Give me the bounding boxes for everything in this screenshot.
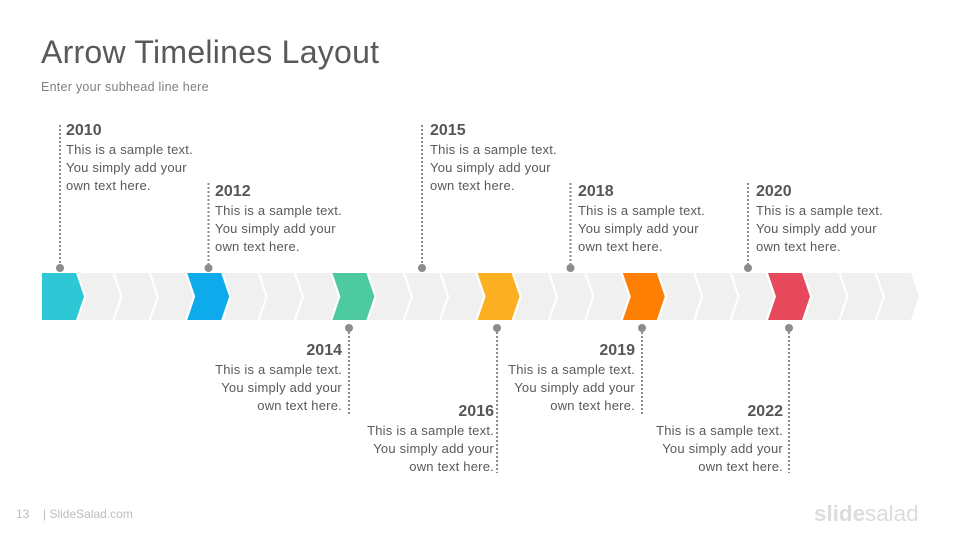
text: 2020: You simply add your xyxy=(756,221,877,236)
title: Arrow Timelines Layout xyxy=(41,34,379,70)
text: 2012 xyxy=(215,183,342,254)
text: 2016: own text here. xyxy=(409,459,494,474)
text: 2010: This is a sample text. xyxy=(66,142,193,157)
text: 2014: You simply add your xyxy=(221,380,342,395)
chevron 2012 xyxy=(187,273,229,320)
text: 2015: 2015 xyxy=(430,122,466,139)
chevron 2019 xyxy=(623,273,665,320)
text: 2022: own text here. xyxy=(698,459,783,474)
text: 2014 xyxy=(215,342,342,413)
text: 2018: 2018 xyxy=(578,183,614,200)
text: 2012: This is a sample text. xyxy=(215,203,342,218)
page number: 13 xyxy=(16,507,29,521)
text: 2010: You simply add your xyxy=(66,160,187,175)
text: 2022: 2022 xyxy=(747,403,783,420)
text: 2022: This is a sample text. xyxy=(656,423,783,438)
text: 2014: This is a sample text. xyxy=(215,362,342,377)
text: 2015 xyxy=(430,122,557,193)
text: 2018: You simply add your xyxy=(578,221,699,236)
text: 2020: 2020 xyxy=(756,183,792,200)
footer: site name: | SlideSalad.com xyxy=(43,507,133,521)
subhead: Enter your subhead line here xyxy=(41,80,209,94)
text: 2018: own text here. xyxy=(578,239,663,254)
chevron 2022 xyxy=(768,273,810,320)
text: 2010 xyxy=(66,122,193,193)
text: 2015: You simply add your xyxy=(430,160,551,175)
chevron 2010 xyxy=(42,273,84,320)
connectors and dots xyxy=(56,125,793,473)
text: 2016 xyxy=(367,403,494,474)
text: 2019: This is a sample text. xyxy=(508,362,635,377)
text: 2019: 2019 xyxy=(599,342,635,359)
text: 2019 xyxy=(508,342,635,413)
logo: slidesalad: slidesalad xyxy=(814,501,919,526)
text: 2012: You simply add your xyxy=(215,221,336,236)
text: 2022: You simply add your xyxy=(662,441,783,456)
text: 2012: own text here. xyxy=(215,239,300,254)
text: 2010: 2010 xyxy=(66,122,102,139)
text: 2022 xyxy=(656,403,783,474)
text: 2015: own text here. xyxy=(430,178,515,193)
text: 2018: This is a sample text. xyxy=(578,203,705,218)
text: 2015: This is a sample text. xyxy=(430,142,557,157)
chevron 2014 xyxy=(332,273,374,320)
text: 2016: 2016 xyxy=(458,403,494,420)
text: 2016: You simply add your xyxy=(373,441,494,456)
text: 2014: own text here. xyxy=(257,398,342,413)
chevron 2016 xyxy=(478,273,520,320)
text: 2012: 2012 xyxy=(215,183,251,200)
text: 2019: You simply add your xyxy=(514,380,635,395)
text: 2020 xyxy=(756,183,883,254)
text: 2016: This is a sample text. xyxy=(367,423,494,438)
text: 2019: own text here. xyxy=(550,398,635,413)
text: 2018 xyxy=(578,183,705,254)
text: 2014: 2014 xyxy=(306,342,342,359)
text: 2020: own text here. xyxy=(756,239,841,254)
text: 2010: own text here. xyxy=(66,178,151,193)
text: 2020: This is a sample text. xyxy=(756,203,883,218)
